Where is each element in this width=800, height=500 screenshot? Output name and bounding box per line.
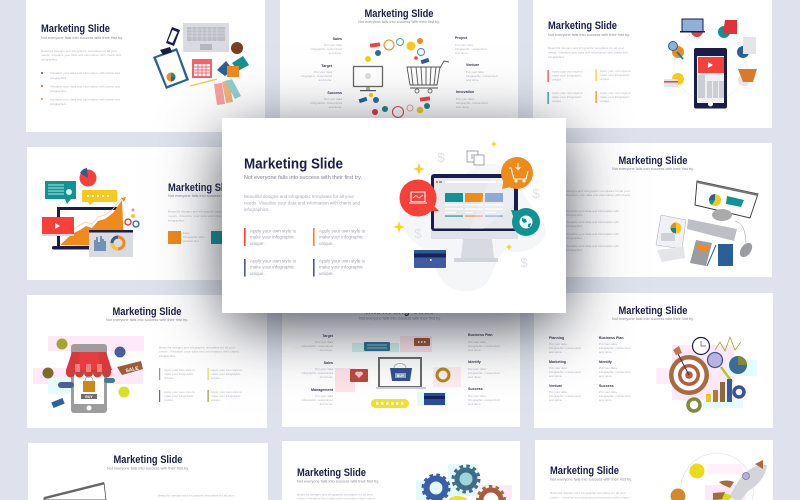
icon: teal globe bubble	[511, 208, 540, 236]
four point list: Apply your own style to	[552, 91, 583, 95]
body text	[159, 346, 240, 358]
point: navy left	[244, 258, 297, 276]
illustration: mobile storefront: BUY	[85, 395, 93, 399]
illustration: monitor with marketing icons	[393, 141, 546, 291]
label grid: and done.	[599, 374, 613, 378]
panel: slide top center	[280, 0, 518, 119]
left labels: Sales	[324, 361, 333, 365]
body text: Visualize your data and information with charts	[566, 193, 630, 197]
four point list: Apply your own style to	[164, 390, 195, 394]
label grid: Put your data	[599, 390, 617, 394]
left labels: infographic, customized	[301, 398, 333, 402]
label grid: infographic, customized	[549, 394, 581, 398]
left labels: and done.	[329, 51, 342, 55]
point: red: make your infographic	[250, 234, 295, 240]
four point list	[548, 69, 631, 104]
four point list: unique.	[211, 376, 221, 380]
heading: Marketing Slide	[244, 156, 343, 172]
four point list: Apply your own style to	[211, 368, 242, 372]
body text: infographics.	[244, 207, 270, 212]
icon: dollar signs	[414, 150, 540, 270]
right labels: infographic, customized	[468, 344, 500, 348]
body text	[297, 492, 376, 500]
body text	[41, 49, 121, 62]
illustration: target and analytics	[656, 337, 757, 411]
right labels: Put your data	[456, 97, 474, 101]
label grid: infographic, customized	[599, 370, 631, 374]
panel: slide lower right	[534, 293, 773, 428]
label grid: Business Plan	[599, 336, 624, 340]
subtitle: Not everyone falls into success with their first try.	[359, 316, 441, 320]
right labels: and done.	[468, 402, 482, 406]
right labels: Identify	[468, 360, 481, 364]
label grid: Put your data	[599, 342, 617, 346]
right labels: Success	[468, 387, 483, 391]
point: red: Apply your own style to	[250, 228, 297, 234]
subtitle: Not everyone falls into success with their first try.	[358, 20, 440, 24]
label grid: Put your data	[599, 366, 617, 370]
left labels: and done.	[320, 348, 333, 352]
four point list: unique.	[600, 99, 610, 103]
body text: Beautiful designs and infographic templates for all your	[41, 49, 117, 53]
monitor	[431, 174, 518, 262]
four point list: make your infographic	[211, 372, 241, 376]
right labels: Venture	[466, 63, 479, 67]
heading: Marketing Slide	[364, 8, 434, 20]
illustration: monitor and shopping cart	[354, 38, 449, 118]
body text: infographics.	[566, 213, 583, 217]
body text: infographics.	[566, 236, 583, 240]
left labels: and done.	[320, 375, 333, 379]
icon: dollar signs: $	[520, 255, 528, 270]
right labels: Business Plan	[468, 333, 493, 337]
label grid: and done.	[549, 374, 563, 378]
panel: slide top left	[26, 0, 265, 132]
point: orange: unique.	[319, 241, 334, 246]
body text	[548, 46, 628, 59]
heading: Marketing Slide	[618, 155, 688, 167]
left labels	[301, 334, 334, 406]
body text: infographics.	[168, 218, 185, 222]
body text: needs. Visualize your data and information with charts and	[548, 50, 628, 54]
body text	[550, 491, 630, 500]
right labels: and done.	[456, 105, 470, 109]
feature icons: infographic slide	[183, 235, 205, 239]
right labels: infographic, customized	[456, 101, 488, 105]
icon: dollar signs: $	[414, 226, 422, 241]
bullet list: infographics.	[50, 76, 67, 80]
label grid: Put your data	[549, 366, 567, 370]
heading: Marketing Slide	[366, 304, 434, 316]
body text: Beautiful designs and infographic templates for all your	[297, 492, 373, 496]
left labels: infographic, customized	[310, 101, 342, 105]
illustration: online store basket: BUY	[397, 374, 405, 378]
body text: infographics.	[159, 354, 176, 358]
feature icons: Easy	[183, 231, 190, 235]
heading: Marketing Slide	[618, 305, 688, 317]
panel: slide bottom right	[535, 440, 773, 500]
body text: Visualize your data and information with	[566, 209, 619, 213]
right labels	[468, 333, 500, 406]
point: navy right	[313, 258, 366, 276]
illustration: rocket launch	[670, 453, 767, 500]
right labels: and done.	[468, 348, 482, 352]
right labels: Innovation	[456, 90, 474, 94]
left labels: infographic, customized	[301, 344, 333, 348]
label grid: Identify	[599, 360, 612, 364]
panel: slide middle left	[27, 147, 267, 280]
panel: slide bottom left	[28, 443, 268, 500]
body text: needs. Visualize your data and information with charts	[550, 496, 630, 500]
label grid: and done.	[599, 398, 613, 402]
body text: needs. Visualize your data and information with charts and	[41, 53, 121, 57]
point: navy left: Apply your own style to	[250, 258, 297, 264]
left labels: Success	[327, 91, 342, 95]
illustration: laptop with growth chart	[42, 168, 139, 257]
right labels: Project	[455, 36, 468, 40]
subtitle: Not everyone falls into success with their first try.	[41, 36, 123, 40]
panel: featured main slide	[222, 118, 566, 313]
left labels: Target	[321, 64, 333, 68]
left labels: Management	[311, 388, 334, 392]
right labels: infographic, customized	[455, 47, 487, 51]
four point list: unique.	[600, 77, 610, 81]
four point list: make your infographic	[552, 95, 582, 99]
heading: Marketing Slide	[168, 182, 237, 194]
body text: needs. Visualize your data and information with charts	[168, 214, 248, 218]
right labels: infographic, customized	[468, 398, 500, 402]
bullet list	[41, 71, 120, 106]
body text: infographics.	[41, 58, 58, 62]
label grid: infographic, customized	[599, 394, 631, 398]
main slide shadow	[222, 118, 566, 313]
icon: orange cart bubble	[501, 157, 533, 189]
illustration: tilted screen	[44, 482, 106, 500]
right labels: Put your data	[466, 70, 484, 74]
subtitle: Not everyone falls into success with their first try.	[168, 194, 250, 198]
point: orange: Apply your own style to	[319, 228, 366, 234]
left labels: Put your data	[315, 340, 333, 344]
illustration: phone with orbit icons	[664, 19, 757, 108]
icon: chat bubbles	[467, 151, 484, 165]
four point list: Apply your own style to	[164, 368, 195, 372]
label grid: and done.	[549, 350, 563, 354]
body text: infographics.	[566, 224, 583, 228]
feature icons	[168, 231, 224, 244]
four point list: Apply your own style to	[211, 390, 242, 394]
right labels: Put your data	[468, 340, 486, 344]
label grid: Put your data	[549, 390, 567, 394]
point: navy left: unique.	[250, 271, 265, 276]
subtitle: Not everyone falls into success with their first try.	[612, 167, 694, 171]
body text: Beautiful designs and infographic templates for all your	[159, 346, 235, 350]
left labels: Sales	[333, 37, 342, 41]
label grid: Marketing	[549, 360, 566, 364]
label grid: infographic, customized	[599, 346, 631, 350]
label grid: Success	[599, 384, 614, 388]
four point list: make your infographic	[600, 95, 630, 99]
four point list: make your infographic	[600, 73, 630, 77]
four point list: make your infographic	[211, 394, 241, 398]
four point list: Apply your own style to	[600, 69, 631, 73]
left labels: and done.	[319, 78, 332, 82]
right labels	[455, 36, 498, 109]
heading: Marketing Slide	[114, 454, 182, 466]
panel: slide lower center	[282, 304, 520, 427]
panel: slide lower left	[27, 295, 267, 428]
heading: Marketing Slide	[297, 467, 366, 479]
right labels: infographic, customized	[466, 74, 498, 78]
subtitle: Not everyone falls into success with their first try.	[548, 33, 630, 37]
illustration: desk items	[153, 23, 249, 105]
point: navy left: make your infographic	[250, 264, 295, 270]
left labels: Put your data	[314, 70, 332, 74]
point: navy right: make your infographic	[319, 264, 364, 270]
right labels: and done.	[468, 375, 482, 379]
four point list: make your infographic	[164, 394, 194, 398]
label grid	[549, 336, 631, 402]
point: navy right: unique.	[319, 271, 334, 276]
icon: credit card	[414, 250, 446, 268]
illustration: online store basket	[335, 336, 461, 408]
icon: sparkles	[393, 141, 512, 250]
icon: dollar signs: $	[437, 150, 445, 165]
heading: Marketing Slide	[41, 23, 110, 35]
feature icons: product text	[183, 239, 199, 243]
bullet list: Visualize your data and information with charts and	[50, 98, 120, 102]
label grid: and done.	[599, 350, 613, 354]
right labels: Put your data	[455, 43, 473, 47]
point: orange: make your infographic	[319, 234, 364, 240]
heading: Marketing Slide	[550, 465, 619, 477]
panel: slide top right	[533, 0, 772, 128]
body text: Visualize your data and information with	[566, 244, 619, 248]
panel: slide bottom center	[282, 441, 520, 500]
left labels: infographic, customized	[300, 74, 332, 78]
body text: infographics.	[548, 55, 565, 59]
body text: needs. Visualize your data and information with charts	[159, 350, 240, 354]
left labels: Put your data	[315, 394, 333, 398]
four point list: make your infographic	[552, 74, 582, 78]
left labels: Put your data	[315, 367, 333, 371]
point: red: unique.	[250, 241, 265, 246]
left labels: and done.	[329, 105, 342, 109]
right labels: and done.	[455, 51, 469, 55]
body text	[244, 194, 360, 212]
subtitle: Not everyone falls into success with their first try.	[106, 318, 188, 322]
body text: Beautiful designs and infographic templates for all your	[548, 46, 624, 50]
subtitle: Not everyone falls into success with their first try.	[244, 175, 362, 181]
body text	[168, 210, 248, 222]
subtitle: Not everyone falls into success with their first try.	[107, 466, 189, 470]
point: navy right: Apply your own style to	[319, 258, 366, 264]
right labels: Put your data	[468, 367, 486, 371]
heading: Marketing Slide	[548, 20, 617, 32]
body text: infographics.	[566, 248, 583, 252]
right labels: Put your data	[468, 394, 486, 398]
illustration: mobile storefront	[33, 336, 144, 413]
label grid: Planning	[549, 336, 564, 340]
body text: Beautiful designs and infographic templates for all your	[158, 494, 234, 498]
left labels: Target	[322, 334, 334, 338]
subtitle: Not everyone falls into success with their first try.	[550, 478, 632, 482]
right labels: and done.	[466, 78, 480, 82]
left labels: infographic, customized	[310, 47, 342, 51]
four point list: Apply your own style to	[600, 91, 631, 95]
four point list: unique.	[164, 398, 174, 402]
left labels: infographic, customized	[301, 371, 333, 375]
four point list: unique.	[164, 376, 174, 380]
four point list: unique.	[552, 99, 562, 103]
label grid: infographic, customized	[549, 346, 581, 350]
point: red	[244, 228, 297, 246]
icon: dollar signs: $	[532, 186, 540, 201]
body text: Beautiful designs and infographic templates for all your	[550, 491, 626, 495]
four point list: Apply your own style to	[552, 70, 583, 74]
four point list: unique.	[211, 398, 221, 402]
bullet list: infographics.	[50, 89, 67, 93]
left labels: Put your data	[324, 97, 342, 101]
left labels: Put your data	[324, 43, 342, 47]
four point list: make your infographic	[164, 372, 194, 376]
left labels	[300, 37, 342, 109]
point: orange	[313, 228, 366, 246]
label grid: Put your data	[549, 342, 567, 346]
heading: Marketing Slide	[112, 306, 182, 318]
bullet list: Visualize your data and information with charts and	[50, 84, 120, 88]
illustration: gears	[416, 464, 512, 500]
illustration: mobile storefront: SALE	[125, 366, 140, 374]
body text: Beautiful designs and infographic templates for all your	[244, 194, 354, 199]
bullet list: infographics.	[50, 102, 67, 106]
label grid: and done.	[549, 398, 563, 402]
body text: needs. Visualize your data and information with charts and	[244, 200, 360, 206]
body text: Beautiful designs and infographic templates for all your	[168, 210, 244, 214]
icon: red chart bubble	[400, 180, 439, 216]
body text	[566, 189, 630, 252]
left labels: and done.	[320, 402, 333, 406]
bullet list: Visualize your data and information with charts and	[50, 71, 120, 75]
four point list: unique.	[552, 78, 562, 82]
illustration: desktop workspace	[656, 181, 758, 266]
body text: Visualize your data and information with	[566, 220, 619, 224]
four point list	[159, 368, 242, 402]
subtitle: Not everyone falls into success with their first try.	[612, 317, 694, 321]
right labels: infographic, customized	[468, 371, 500, 375]
panel: slide middle right	[566, 143, 772, 277]
label grid: Venture	[549, 384, 562, 388]
label grid: infographic, customized	[549, 370, 581, 374]
subtitle: Not everyone falls into success with their first try.	[297, 480, 379, 484]
body text: Visualize your data and information with	[566, 232, 619, 236]
body text: designs and infographic templates for all your	[566, 189, 630, 193]
